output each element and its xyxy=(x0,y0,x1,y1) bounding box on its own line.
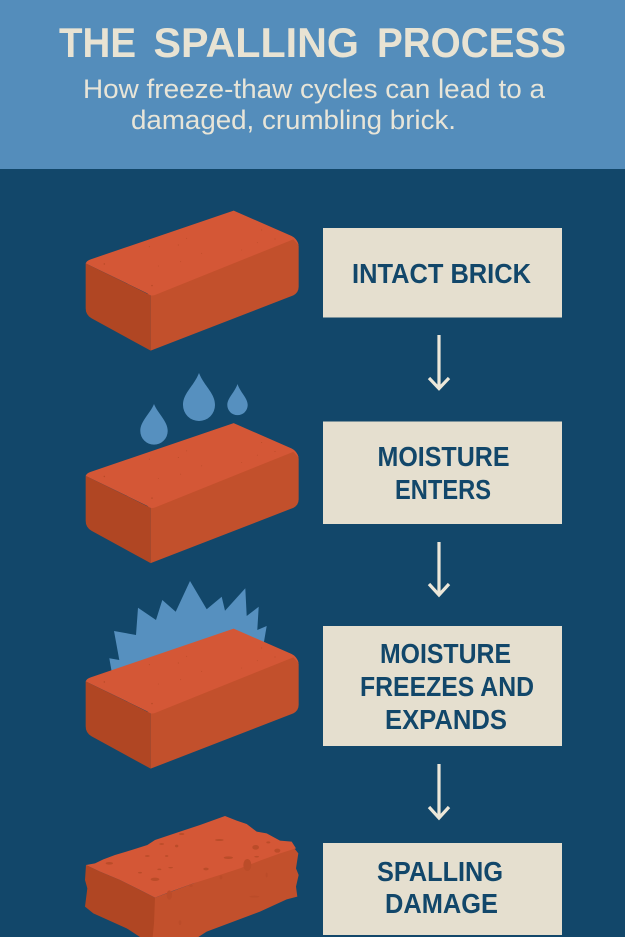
arrow 1 xyxy=(429,335,449,388)
icon: ice burst xyxy=(109,581,267,695)
subtitle: How freeze-thaw cycles can lead to a xyxy=(83,74,545,104)
subtitle xyxy=(83,74,545,135)
step 3: moisture freezes and expands: EXPANDS xyxy=(385,704,507,735)
step 1: intact brick: INTACT BRICK xyxy=(352,258,531,289)
step 1: intact brick xyxy=(323,228,562,318)
step 2: moisture enters: MOISTURE xyxy=(378,441,510,472)
title: SPALLING xyxy=(154,19,359,66)
icon: intact brick xyxy=(86,211,299,351)
title: PROCESS xyxy=(377,19,566,66)
icon: freezing brick xyxy=(86,629,299,769)
step 3: moisture freezes and expands xyxy=(323,626,562,746)
step 4: spalling damage: SPALLING xyxy=(377,856,503,887)
icon: water drops xyxy=(140,373,248,445)
step 4: spalling damage: DAMAGE xyxy=(385,888,498,919)
icon: moisture brick xyxy=(86,423,299,563)
title xyxy=(59,19,566,66)
arrow 3 xyxy=(429,764,449,818)
title: THE xyxy=(59,19,136,66)
subtitle: damaged, crumbling brick. xyxy=(131,105,456,135)
step 4: spalling damage xyxy=(323,843,562,935)
step 3: moisture freezes and expands: MOISTURE xyxy=(380,638,511,669)
step 3: moisture freezes and expands: FREEZES AND xyxy=(360,671,534,702)
arrow 2 xyxy=(429,542,449,595)
step 2: moisture enters: ENTERS xyxy=(395,474,491,505)
header panel xyxy=(0,0,625,169)
icon: spalled brick xyxy=(85,816,299,937)
step 2: moisture enters xyxy=(323,422,562,524)
